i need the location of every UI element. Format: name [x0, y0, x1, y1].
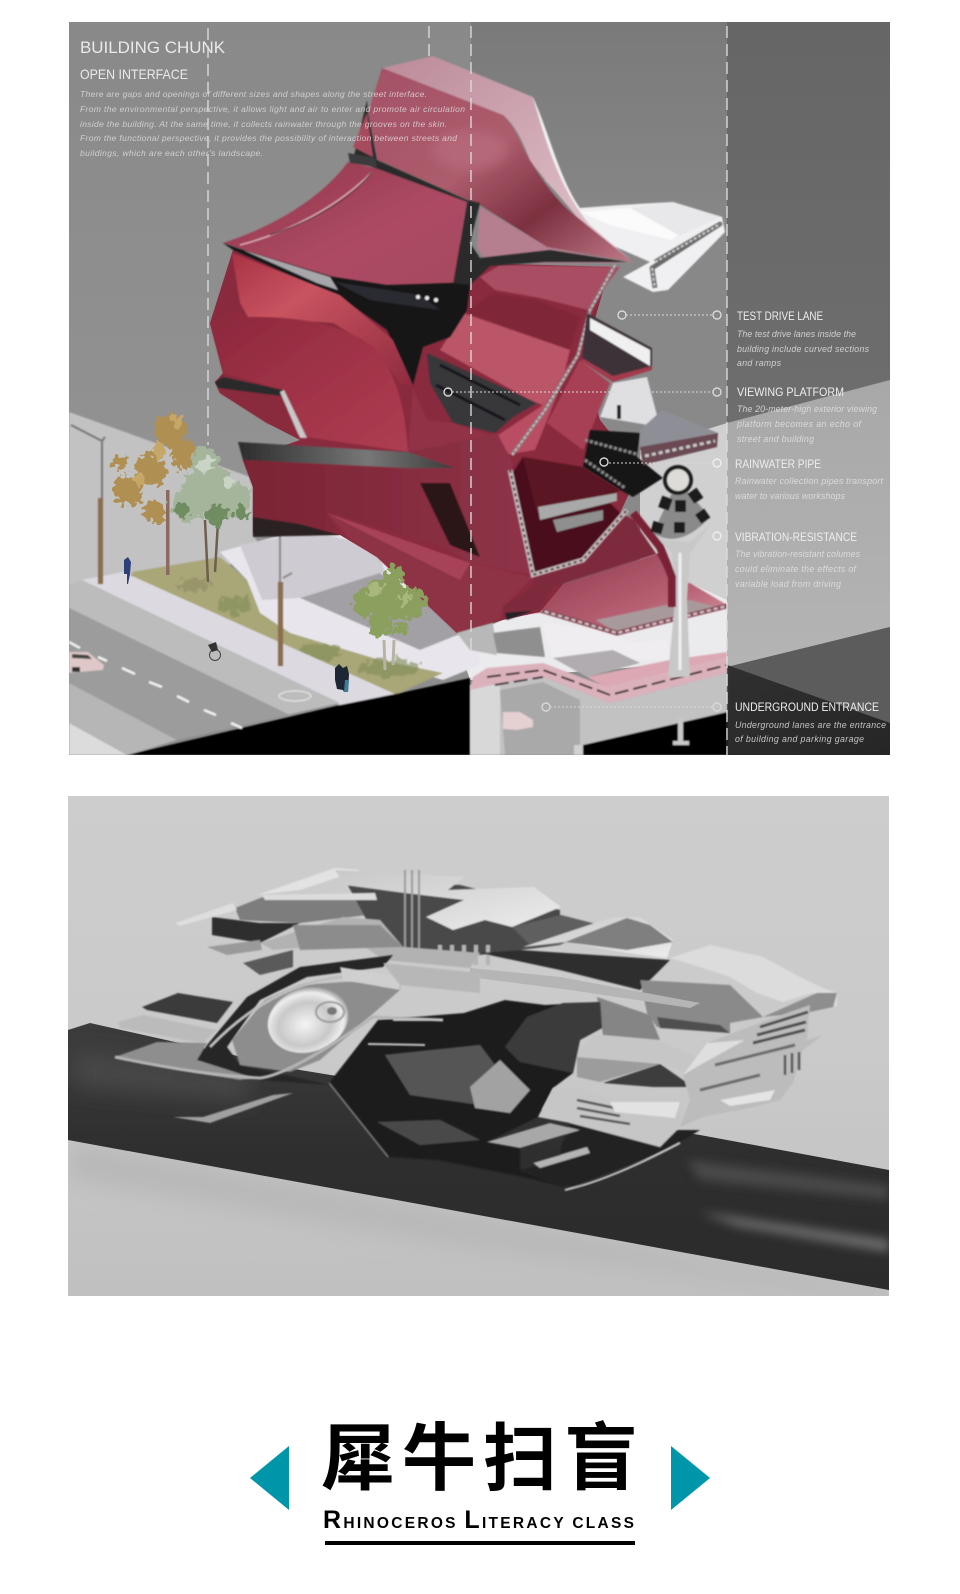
building: red lower body	[209, 253, 484, 452]
long glass ledge	[238, 442, 455, 468]
icon: pedestrians and cyclist	[124, 557, 349, 692]
heading: open interface: OPEN INTERFACE	[80, 66, 188, 82]
heading: building chunk: BUILDING CHUNK	[80, 38, 226, 57]
callout: rainwater pipe: RAINWATER PIPE	[735, 459, 821, 471]
callout: test drive lane: building include curved sections	[737, 344, 870, 354]
building: black recess band	[223, 243, 470, 385]
panel background tones	[69, 22, 890, 755]
callout: viewing platform: VIEWING PLATFORM	[737, 387, 844, 399]
icon: rainwater wheel and fan	[652, 492, 706, 540]
tree: foreground green	[352, 565, 426, 670]
callout leader lines	[444, 311, 721, 711]
subtitle: English name: RHINOCEROS LITERACY CLASS	[323, 1506, 634, 1534]
machine: central dark body	[329, 1000, 602, 1188]
panel: building chunk exploded axonometric	[69, 22, 890, 755]
vibration-resistant column	[633, 465, 712, 677]
icon: right teal arrow	[671, 1446, 710, 1510]
building: main upper face	[223, 100, 627, 287]
callout: underground entrance: of building and parking garage	[735, 734, 864, 744]
dark strip spine	[353, 100, 627, 287]
callout: underground entrance: Underground lanes are the entrance	[735, 720, 886, 730]
callout: test drive lane	[737, 311, 870, 368]
building: cut section interior with trusses	[510, 457, 627, 575]
machine: lower right box and plates	[487, 1087, 700, 1190]
tree: autumn	[113, 413, 199, 575]
upper shell pale face	[382, 56, 633, 262]
callout: vibration-resistance: variable load from driving	[735, 579, 841, 589]
callout: rainwater pipe	[735, 459, 884, 501]
callout: viewing platform: The 20-meter-high exterior viewing	[737, 404, 877, 414]
tree: green	[171, 447, 252, 582]
beam shadow	[68, 1140, 889, 1300]
machine: upper shell plates	[175, 868, 837, 1007]
text block: open interface description: From the environmental perspective, it allows light and air to enter and promote air circulation	[80, 104, 465, 114]
machine: central lens	[259, 977, 357, 1063]
building: rear floor and basement	[469, 650, 728, 755]
callout: rainwater pipe: Rainwater collection pipes transport	[735, 476, 884, 486]
callout: viewing platform: platform becomes an echo of	[736, 419, 863, 429]
text block: open interface description: buildings, which are each other's landscape.	[80, 148, 263, 158]
callout: underground entrance	[735, 702, 886, 744]
grid platform	[640, 410, 718, 447]
icon: left teal arrow	[250, 1446, 289, 1510]
street lamp left	[71, 425, 105, 584]
title: Chinese brand name: 犀牛扫盲	[321, 1417, 638, 1500]
building: right mid panels	[427, 265, 615, 455]
text block: open interface description: From the functional perspective, it provides the possibility of interaction between streets and	[80, 133, 457, 143]
street lamp right	[253, 508, 292, 666]
panel: grayscale machine section on dark beam	[68, 796, 889, 1300]
building: test drive lane box and viewing stairs	[582, 313, 718, 497]
machine: long diagonal rail	[470, 968, 700, 1008]
dashed guide lines	[208, 26, 727, 755]
callout: test drive lane: The test drive lanes inside the	[737, 329, 856, 339]
panel background	[68, 796, 889, 1296]
dark beam	[68, 1023, 889, 1290]
machine: left plates	[115, 955, 400, 1123]
street and landscape ground	[69, 412, 480, 755]
building: lower floor plate	[503, 553, 727, 633]
title underline	[325, 1541, 635, 1545]
callout: viewing platform	[736, 387, 877, 444]
callout: rainwater pipe: water to various workshops	[735, 491, 846, 501]
road lane dashes	[69, 642, 242, 728]
callout: test drive lane: and ramps	[737, 358, 782, 368]
callout: vibration-resistance: could eliminate the effects of	[735, 564, 858, 574]
text block: open interface description: inside the building. At the same time, it collects rainwater through the grooves on the skin.	[80, 119, 447, 129]
callout: vibration-resistance	[735, 532, 861, 589]
building: upper shell white flank	[368, 56, 725, 310]
text block: open interface description: There are gaps and openings of different sizes and shapes along the street interface.	[80, 89, 427, 99]
machine: plate lines and box	[115, 963, 480, 1078]
callout: test drive lane: TEST DRIVE LANE	[737, 311, 823, 323]
upper shell dark rose face	[368, 68, 633, 262]
pink slab edge	[470, 657, 727, 703]
callout: vibration-resistance: VIBRATION-RESISTANCE	[735, 532, 857, 544]
black truss middle	[583, 430, 663, 497]
callout: viewing platform: street and building	[737, 434, 814, 444]
icon: car on road	[69, 652, 104, 673]
machine: right side gray fins	[577, 980, 837, 1127]
text block: open interface description	[80, 89, 465, 158]
building: lower blade walls	[238, 433, 672, 657]
callout: vibration-resistance: The vibration-resistant columes	[735, 549, 861, 559]
footer: brand title block	[250, 1417, 710, 1545]
callout: underground entrance: UNDERGROUND ENTRANCE	[735, 702, 879, 714]
building: base body silhouette	[210, 243, 640, 633]
